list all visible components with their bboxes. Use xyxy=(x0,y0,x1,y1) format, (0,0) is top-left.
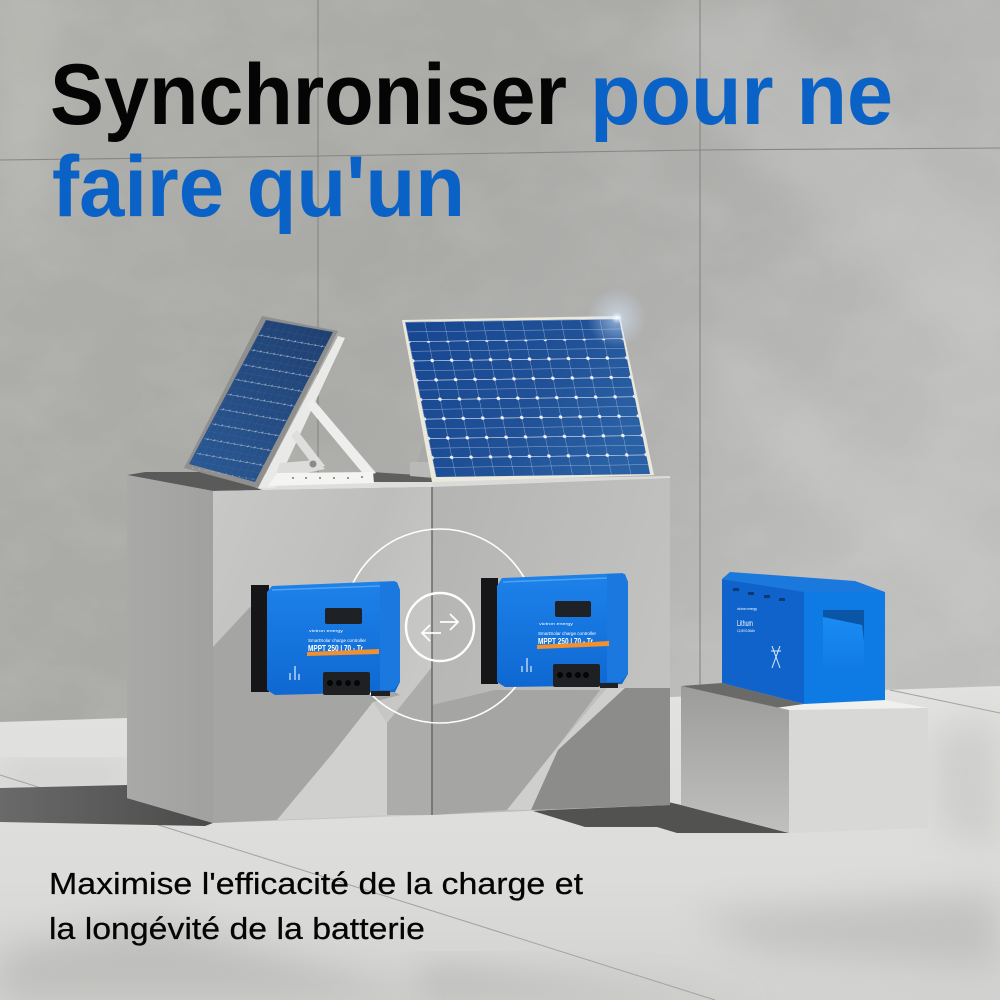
plinth: centre concrete block xyxy=(432,476,670,815)
background: concrete wall xyxy=(0,0,1000,725)
battery label xyxy=(737,607,757,633)
battery label: victron energy xyxy=(737,607,757,611)
battery label: 12,8V/100Ah xyxy=(737,629,755,633)
panel glare xyxy=(587,288,647,348)
block front face xyxy=(213,487,432,823)
cast shadow band xyxy=(432,690,600,815)
label text xyxy=(538,621,597,646)
label text: victron energy xyxy=(309,628,343,633)
panel cells xyxy=(189,320,333,482)
block top face xyxy=(127,472,432,491)
title: faire qu'un xyxy=(52,139,465,235)
status bars xyxy=(290,666,299,680)
sync ring: large circle xyxy=(343,529,537,723)
orange stripe xyxy=(537,641,609,649)
plinth: left concrete block xyxy=(127,472,432,823)
title xyxy=(50,47,893,235)
dark shadow xyxy=(531,688,670,810)
solar panel: right xyxy=(402,288,654,482)
subtitle: la longévité de la batterie xyxy=(49,911,425,946)
subtitle: Maximise l'efficacité de la charge et xyxy=(49,866,583,901)
floor shadow: left block xyxy=(0,785,213,826)
background: concrete floor xyxy=(0,686,1000,1000)
block left face xyxy=(681,686,789,833)
charge controller: left xyxy=(251,581,400,696)
floor shadow: centre and right blocks xyxy=(533,802,789,833)
mounting bracket xyxy=(481,578,498,684)
orange stripe xyxy=(307,649,379,656)
label text: MPPT 250 | 70 - Tr xyxy=(538,637,593,646)
recycling mark xyxy=(771,646,781,668)
label text xyxy=(308,628,367,653)
block right face xyxy=(789,708,928,833)
panel frame xyxy=(184,316,338,488)
cast shadows on block xyxy=(213,607,400,823)
terminal block xyxy=(323,672,370,695)
label text: SmartSolar charge controller xyxy=(538,631,597,636)
lit diagonal strip xyxy=(507,688,625,810)
battery vents xyxy=(733,588,785,601)
controller body xyxy=(497,573,628,687)
battery handle recess xyxy=(823,610,864,642)
controller body xyxy=(267,581,400,695)
block left face xyxy=(127,475,213,823)
panel stand xyxy=(258,336,376,488)
terminal block xyxy=(553,664,600,687)
rear stand xyxy=(410,443,434,478)
label text: MPPT 250 | 70 - Tr xyxy=(308,644,363,653)
status bars xyxy=(522,658,531,672)
subtitle xyxy=(49,866,583,946)
charge controller: right xyxy=(481,573,628,688)
lithium battery xyxy=(722,572,885,704)
mounting bracket xyxy=(251,585,269,692)
battery left face xyxy=(722,579,804,704)
panel frame xyxy=(402,316,654,482)
sync icon: circle with opposing arrows xyxy=(406,593,474,661)
label text: SmartSolar charge controller xyxy=(308,638,367,643)
battery right face xyxy=(804,592,885,704)
label text: victron energy xyxy=(539,621,573,626)
plinth: right concrete block xyxy=(681,683,928,833)
title: Synchroniser xyxy=(50,47,567,143)
display cover xyxy=(325,608,362,624)
display cover xyxy=(555,601,591,617)
battery label: Lithum xyxy=(737,619,753,628)
block top face xyxy=(681,684,928,711)
battery top xyxy=(722,572,885,593)
solar panel: left with white stand xyxy=(184,316,376,488)
title: pour ne xyxy=(590,47,893,143)
panel cells xyxy=(405,319,650,477)
